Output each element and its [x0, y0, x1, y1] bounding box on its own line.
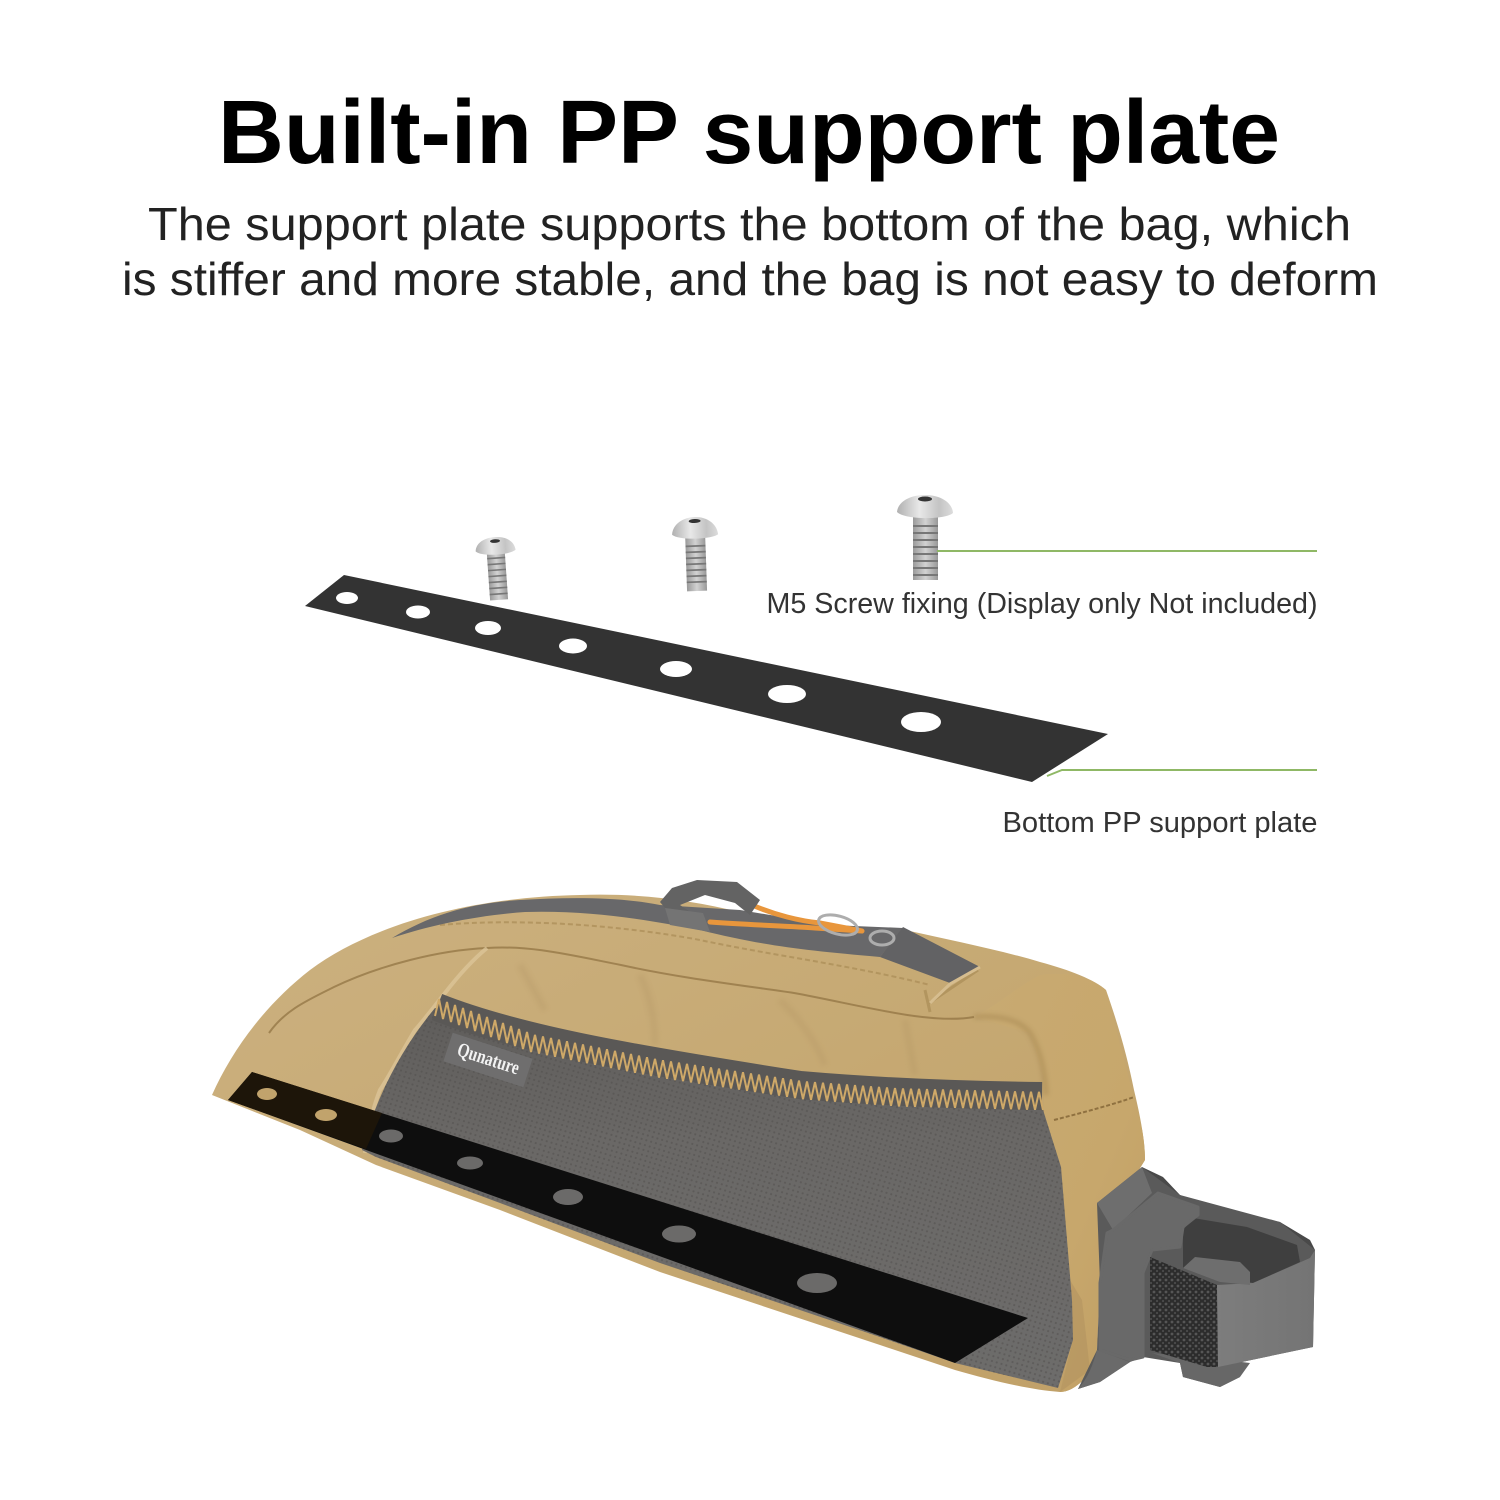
subtitle: [122, 198, 1378, 305]
cord lock: [665, 908, 710, 932]
icon: screw middle: [672, 516, 720, 592]
mesh pocket: [362, 1008, 1073, 1388]
mounting bracket: [1100, 1193, 1198, 1360]
subtitle: The support plate supports the bottom of the bag, which: [148, 198, 1351, 250]
panel tan edge: [930, 967, 980, 1003]
bracket tab: [1097, 1167, 1152, 1230]
brand label: Qunature: [454, 1039, 522, 1079]
subtitle: is stiffer and more stable, and the bag is not easy to deform: [122, 253, 1378, 305]
zipper tape: [437, 1007, 1042, 1096]
strap outer band: [1217, 1250, 1315, 1367]
buckle tab: [1183, 1257, 1250, 1285]
PP plate overlay inside bag: [228, 1072, 1028, 1363]
callout: plate label: Bottom PP support plate: [1002, 807, 1318, 839]
overlay over tan fabric: [228, 1072, 382, 1149]
velcro strip: [1150, 1257, 1218, 1367]
zigzag stitching: [435, 999, 1043, 1110]
fabric folds and shading: [269, 922, 1150, 1392]
grey pull handle: [660, 880, 760, 915]
holes showing tan fabric: [257, 1088, 337, 1121]
strap underlay: [1078, 1167, 1315, 1389]
tan fabric shell: [212, 895, 1145, 1392]
top zipper band: [392, 898, 903, 957]
top-right mesh panel: [880, 927, 980, 983]
holes showing grey mesh: [379, 1130, 837, 1293]
callout: plate leader line: [1047, 770, 1317, 776]
strap back loop: [1142, 1167, 1315, 1290]
orange cord: [710, 905, 862, 931]
brand label: [443, 1033, 533, 1087]
strap inner face: [1183, 1218, 1300, 1283]
icon: screw right: [897, 495, 953, 580]
bag foot bracket: [1078, 1350, 1130, 1389]
zipper pull: [660, 880, 894, 945]
callout: screw leader line: [937, 550, 1317, 552]
callout: screw label: M5 Screw fixing (Display only Not included): [766, 588, 1318, 620]
strap lower foot: [1152, 1353, 1250, 1387]
title: Built-in PP support plate: [218, 83, 1280, 183]
PP support plate: [305, 575, 1108, 782]
icon: screw left: [475, 536, 519, 601]
bag body: [212, 895, 1150, 1392]
metal rings: [816, 911, 894, 945]
strap mount: [1078, 1167, 1315, 1389]
